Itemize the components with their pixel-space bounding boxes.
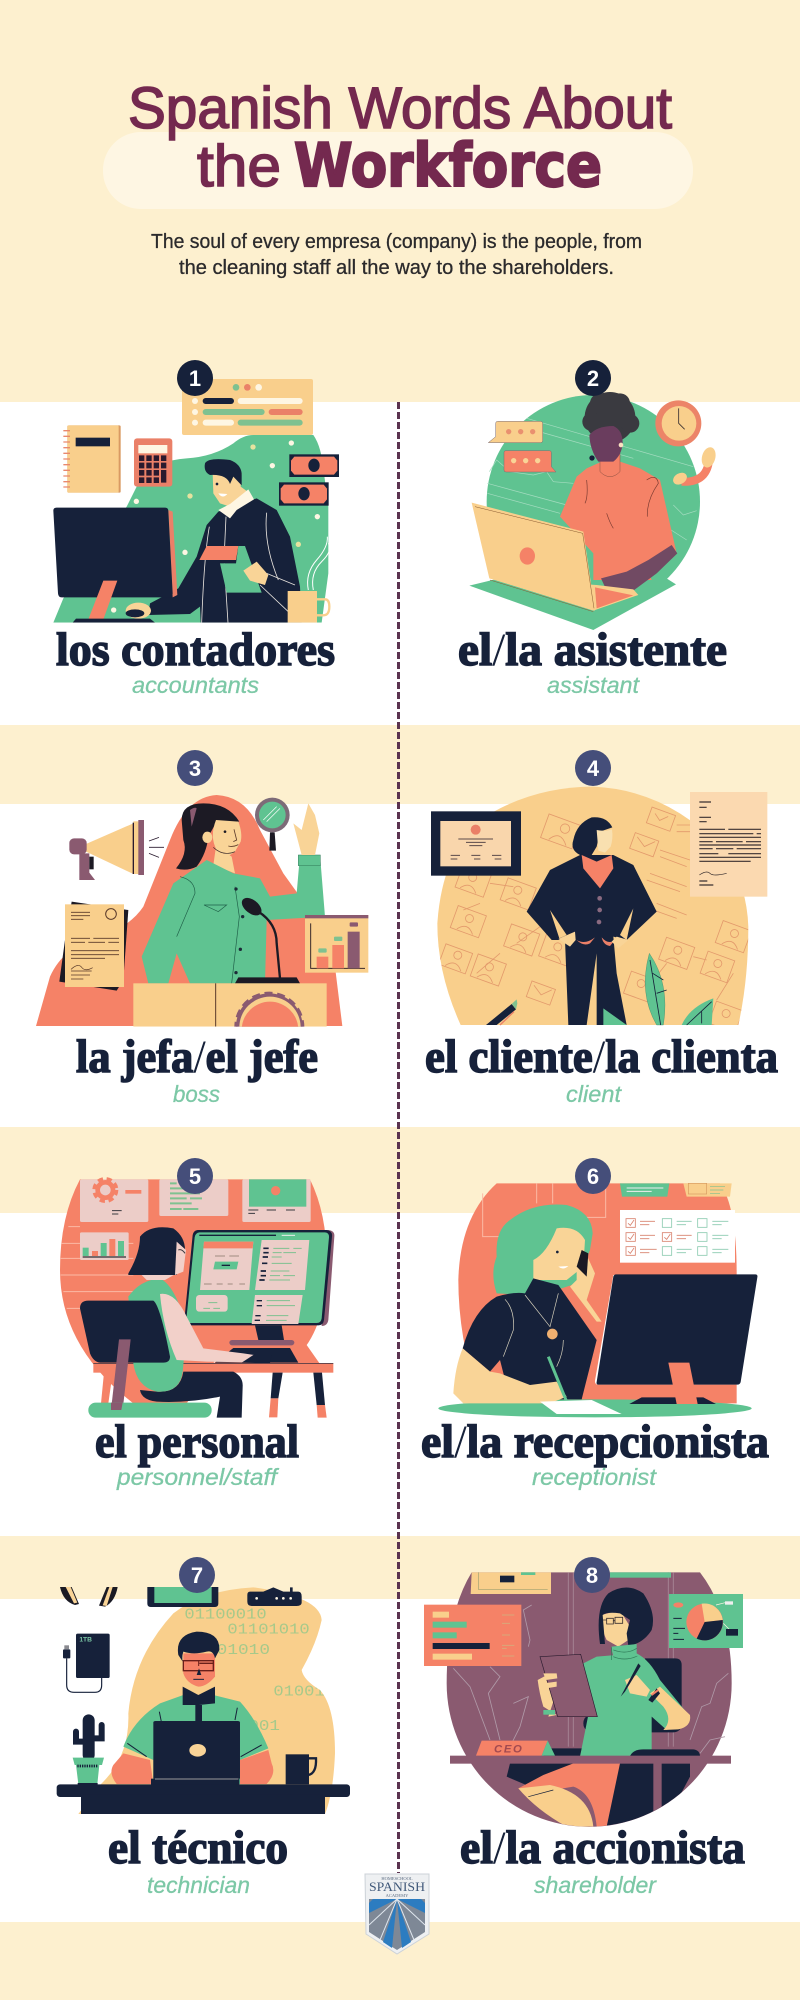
pie chart card: [669, 1594, 743, 1648]
podium: [133, 983, 327, 1027]
document: [59, 902, 128, 991]
router: [247, 1587, 302, 1606]
green desk: [438, 1399, 752, 1417]
checklist: [620, 1210, 735, 1263]
label: el/la recepcionista: el/la recepcionista: [421, 1416, 769, 1468]
number badge 5: [177, 1158, 213, 1194]
logo shield: [365, 1874, 429, 1954]
number badge 7: [179, 1557, 215, 1593]
accountant figure: [126, 459, 302, 623]
label: el personal: el personal: [95, 1416, 299, 1468]
assistant figure: [560, 392, 677, 591]
binary digits: [185, 1608, 324, 1730]
office chair: [80, 1301, 212, 1418]
number badge 8: 8: [586, 1563, 598, 1588]
label: los contadores: los contadores: [56, 624, 335, 676]
laptop: [151, 1721, 240, 1785]
laptop: [472, 503, 638, 612]
number badge 6: 6: [587, 1164, 599, 1189]
headphones: [60, 1587, 118, 1607]
intro text: [151, 231, 642, 279]
number badge 3: [177, 750, 213, 786]
title line 2: Workforce: [294, 131, 602, 201]
translation: receptionist: receptionist: [532, 1464, 658, 1490]
label: el/la accionista: el/la accionista: [460, 1822, 745, 1874]
intro text: The soul of every empresa (company) is the people, from: [151, 231, 642, 253]
number badge 4: 4: [587, 756, 600, 781]
binary digits: 01100010: [184, 1607, 267, 1623]
number badge 5: 5: [189, 1164, 201, 1189]
pen: [486, 999, 517, 1025]
salmon report card: [424, 1605, 521, 1666]
panel 2: el/la asistente: [458, 360, 727, 698]
translation: shareholder: shareholder: [534, 1872, 657, 1898]
logo shield: ACADEMY: [386, 1893, 409, 1898]
chat bubbles: [488, 421, 556, 472]
title line 2: the: [197, 134, 281, 199]
number badge 1: 1: [189, 366, 201, 391]
lower body and desk: [507, 1748, 700, 1827]
number badge 2: [575, 360, 611, 396]
notebook: [63, 425, 121, 493]
translation: personnel/staff: personnel/staff: [116, 1464, 280, 1490]
illustration: boss: [36, 795, 368, 1027]
label: el cliente/la clienta: el cliente/la clienta: [425, 1031, 778, 1083]
presenter figure: [142, 803, 325, 983]
illustration: assistant: [467, 392, 718, 650]
title pill highlight: [103, 132, 693, 209]
translation: boss: boss: [173, 1081, 220, 1107]
illustration: receptionist: [438, 1183, 757, 1417]
org chart pattern: [439, 807, 751, 1033]
title line 2: [197, 131, 602, 201]
number badge 4: [575, 750, 611, 786]
number badge 6: [575, 1158, 611, 1194]
wall cards: [80, 1179, 311, 1222]
computer monitor: [53, 508, 177, 623]
desk chair: [583, 1658, 682, 1732]
panel 1: los contadores: [53, 360, 339, 698]
binary digits: 01010: [217, 1643, 270, 1659]
label: el técnico: el técnico: [108, 1822, 288, 1874]
monitor with dashboard: [184, 1230, 334, 1345]
magnifier: [255, 798, 290, 851]
illustration: technician: [57, 1587, 350, 1814]
bar chart card: [305, 915, 368, 973]
label: la jefa/el jefe: la jefa/el jefe: [76, 1031, 318, 1083]
panel 7: el técnico: [57, 1557, 350, 1898]
logo shield: HOMESCHOOL: [381, 1876, 413, 1881]
letter document: [690, 792, 767, 897]
binary digits: 01101010: [227, 1622, 310, 1638]
panel 3: la jefa/el jefe: [36, 750, 368, 1107]
mug: [286, 1754, 316, 1784]
panel 4: el cliente/la clienta: [425, 750, 778, 1107]
panel 5: el personal: [60, 1158, 334, 1490]
translation: assistant: assistant: [547, 672, 641, 698]
top cards: [471, 1572, 671, 1594]
certificate: [431, 811, 521, 876]
technician figure: [111, 1632, 273, 1784]
dashboard card: [182, 379, 313, 435]
desk: [57, 1784, 350, 1814]
number badge 7: 7: [191, 1563, 203, 1588]
center dashed divider: [397, 402, 400, 1873]
calculator: [134, 438, 172, 487]
megaphone: [69, 820, 164, 880]
banknotes: [279, 454, 339, 506]
external hard drive: 1TB: [79, 1637, 92, 1644]
binary digits: 001: [248, 1719, 280, 1735]
translation: accountants: accountants: [132, 672, 260, 698]
panel 8: el/la accionista: [424, 1557, 745, 1898]
number badge 2: 2: [587, 366, 599, 391]
CEO nameplate: CEO: [494, 1744, 524, 1756]
microphone: [235, 894, 300, 983]
translation: client: client: [566, 1081, 623, 1107]
number badge 8: [574, 1557, 610, 1593]
title block: [103, 76, 693, 279]
telephone handset: [671, 446, 718, 487]
binary digits: 010010: [273, 1684, 335, 1700]
illustration: client: [431, 787, 767, 1033]
computer monitor: [595, 1274, 757, 1404]
cactus: [73, 1714, 104, 1786]
businesswoman figure: [527, 817, 657, 1025]
label: el/la asistente: el/la asistente: [458, 624, 727, 676]
illustration: shareholder: [424, 1572, 743, 1827]
wall clock: [655, 400, 701, 446]
coffee mug: [288, 537, 330, 623]
panel 6: el/la recepcionista: [421, 1158, 769, 1490]
title line 1: Spanish Words About: [128, 76, 672, 141]
logo shield: SPANISH: [369, 1879, 425, 1894]
translation: technician: technician: [147, 1872, 250, 1898]
number badge 3: 3: [189, 756, 201, 781]
number badge 1: [177, 360, 213, 396]
tablet device: [147, 1587, 218, 1607]
small bar chart card: [80, 1232, 129, 1260]
paper: [540, 1400, 622, 1414]
desk: [93, 1345, 333, 1418]
external hard drive: [63, 1634, 110, 1692]
worker figure: [128, 1227, 272, 1418]
CEO figure: [538, 1587, 690, 1757]
illustration: accountant: [53, 379, 339, 623]
CEO nameplate: [476, 1741, 555, 1756]
intro text: the cleaning staff all the way to the shareholders.: [179, 257, 614, 279]
keyboard: [215, 1348, 298, 1363]
leaves: [603, 953, 713, 1025]
wall tags: [620, 1183, 732, 1197]
receptionist figure: [453, 1204, 602, 1403]
illustration: personnel: [60, 1179, 334, 1418]
